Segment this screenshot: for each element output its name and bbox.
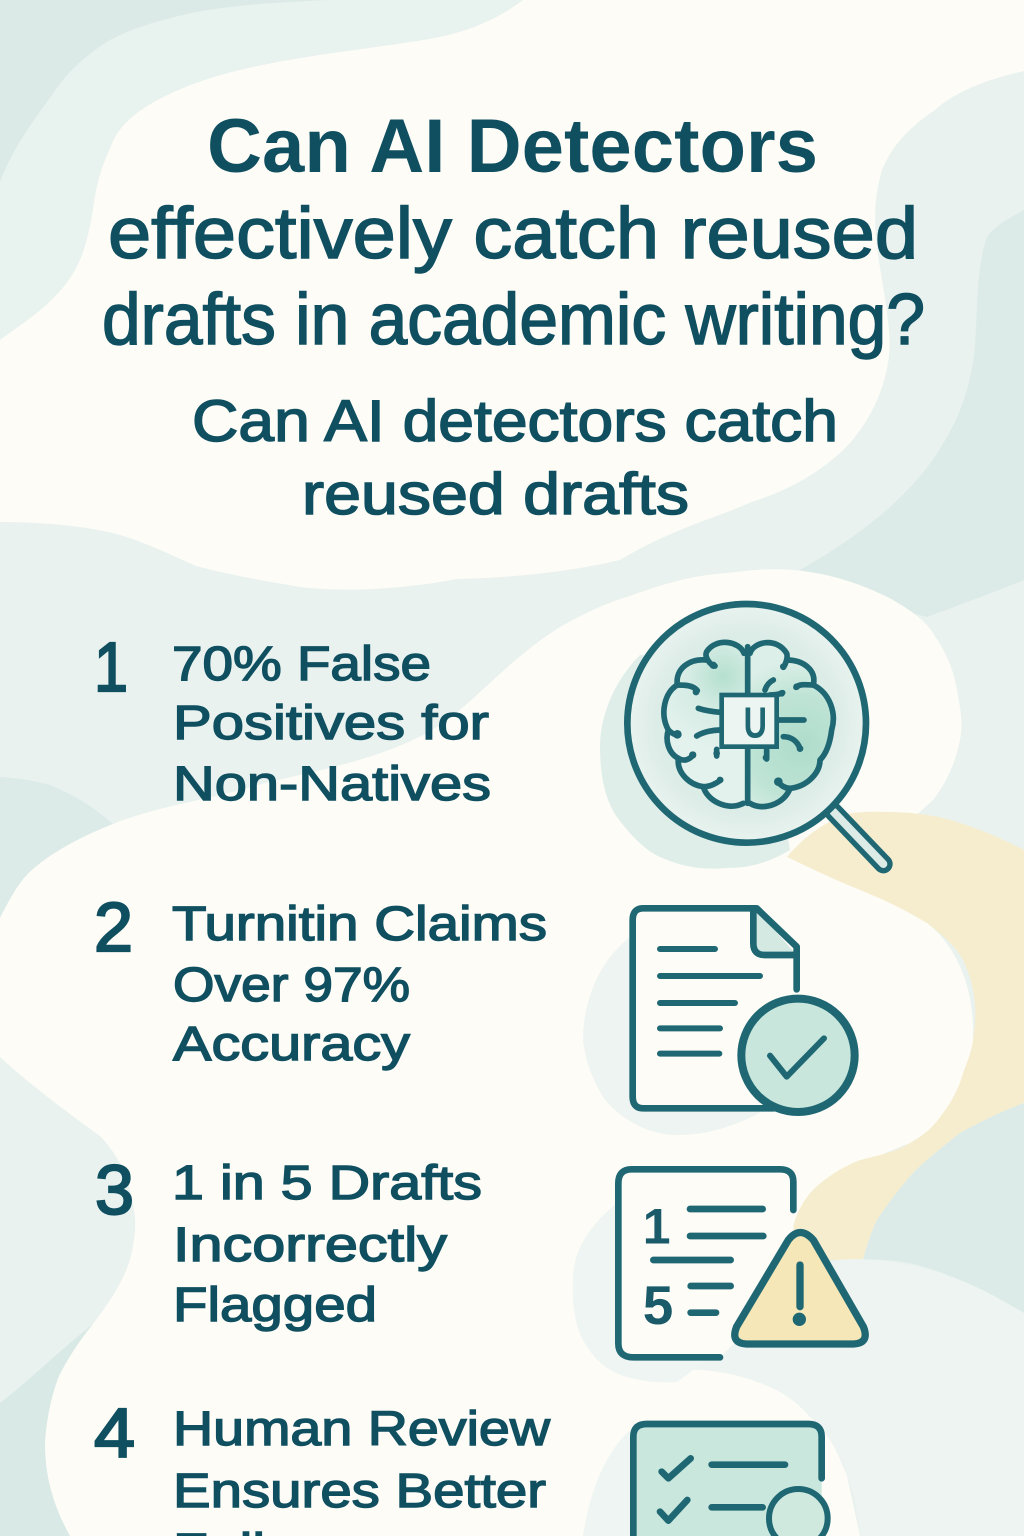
- subtitle: [192, 389, 838, 527]
- item 1: false positives: 1: [94, 628, 128, 706]
- item 3: incorrectly flagged: 3: [95, 1151, 134, 1229]
- title: drafts in academic writing?: [102, 280, 925, 360]
- item 2: Turnitin accuracy: Accuracy: [173, 1018, 410, 1071]
- item 1: false positives: 70% False: [172, 638, 431, 691]
- left dark patch upper: [0, 777, 113, 918]
- item 4: human review: 4: [94, 1394, 135, 1472]
- icon: document with check: [633, 908, 855, 1112]
- subtitle: reused drafts: [302, 462, 689, 527]
- item 1: false positives: [94, 628, 491, 811]
- blob behind icon 4: [583, 1425, 640, 1536]
- item 2: Turnitin accuracy: Turnitin Claims: [172, 898, 547, 951]
- item 3: incorrectly flagged: Flagged: [173, 1279, 377, 1332]
- left dark patch lower: [0, 1324, 93, 1536]
- item 3: incorrectly flagged: [95, 1151, 482, 1332]
- item 1: false positives: Positives for: [173, 697, 489, 750]
- icon: magnifier over AI brain: [627, 604, 883, 864]
- icon: review checklist with magnifier: [633, 1424, 828, 1536]
- subtitle: Can AI detectors catch: [192, 389, 838, 454]
- item 3: incorrectly flagged: 1 in 5 Drafts: [172, 1157, 482, 1210]
- item 2: Turnitin accuracy: [94, 888, 547, 1071]
- icon glyph: chip letter: U: [744, 699, 767, 747]
- item 1: false positives: Non-Natives: [173, 758, 491, 811]
- blob behind icon 1: [600, 655, 790, 869]
- item 3: incorrectly flagged: Incorrectly: [173, 1219, 447, 1272]
- item 4: human review: Human Review: [173, 1403, 550, 1456]
- item 4: human review: Ensures Better: [173, 1465, 546, 1518]
- item 4: human review: [94, 1394, 550, 1536]
- item 2: Turnitin accuracy: Over 97%: [173, 959, 410, 1012]
- blob behind icon 3: [573, 1190, 720, 1382]
- blob behind icon 2: [583, 930, 760, 1135]
- title: [102, 104, 925, 360]
- lower right teal: [863, 1103, 1024, 1313]
- icon: 1 in 5 list with warning triangle: 5: [643, 1274, 673, 1336]
- yellow band: [787, 812, 1024, 1260]
- cream blob: [0, 569, 973, 1536]
- title: effectively catch reused: [108, 194, 918, 274]
- lower right pale area: [677, 1259, 1024, 1536]
- item 2: Turnitin accuracy: 2: [94, 888, 133, 966]
- icon: 1 in 5 list with warning triangle: [618, 1169, 865, 1357]
- title: Can AI Detectors: [207, 104, 818, 189]
- icon: 1 in 5 list with warning triangle: 1: [643, 1198, 671, 1254]
